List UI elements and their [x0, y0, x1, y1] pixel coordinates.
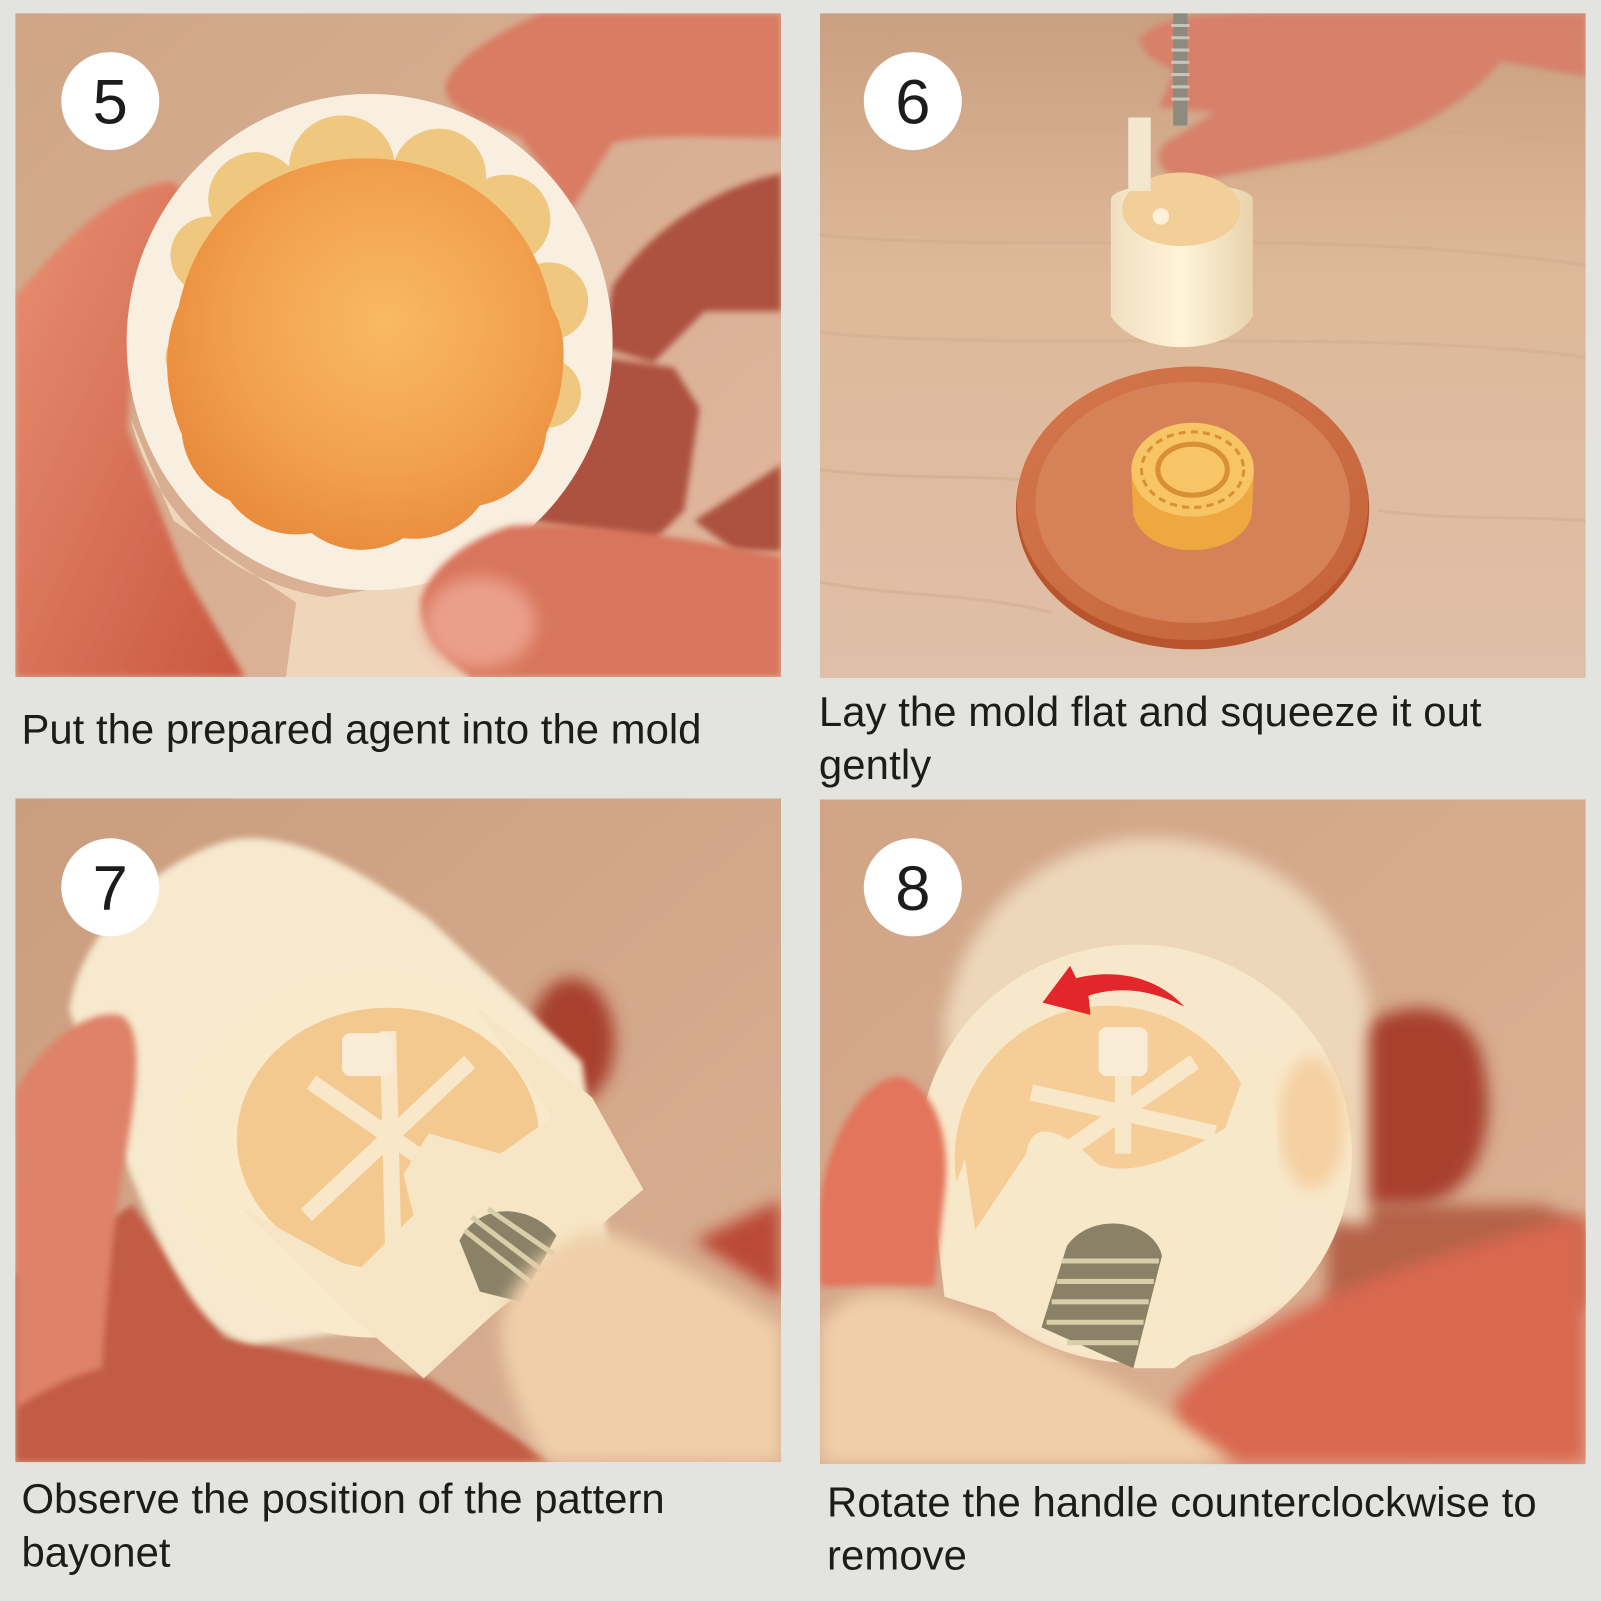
badge: 7: 7 [93, 854, 128, 924]
mold opening [954, 1006, 1241, 1230]
background finger [1348, 1008, 1488, 1205]
hand: lower [15, 1205, 551, 1462]
panel: step 6 photo [820, 13, 1586, 678]
handle cross piece [277, 1090, 644, 1378]
caption: step 5: Put the prepared agent into the mold [21, 705, 701, 752]
badge: 8 [864, 838, 962, 936]
mold face [324, 1326, 376, 1338]
spring [1041, 1223, 1162, 1368]
panel: step 5 photo [15, 13, 781, 677]
inner tab [342, 1033, 393, 1076]
lower background hand [1327, 1205, 1586, 1327]
hand: left finger [820, 1077, 946, 1287]
inner tab [1099, 1027, 1148, 1076]
caption: step 6: Lay the mold flat and squeeze it out [819, 688, 1482, 735]
badge: 5 [61, 52, 159, 150]
caption: step 6 [819, 688, 1482, 788]
hand: bottom thumb [421, 525, 781, 677]
yellow petals inside the mold [165, 115, 588, 428]
mold opening [237, 1008, 539, 1269]
blurred thumb [500, 1230, 781, 1462]
spring rod [1171, 13, 1190, 126]
caption: step 8: Rotate the handle counterclockwise to [827, 1478, 1537, 1525]
panel: step 8 photo [820, 799, 1586, 1464]
mold rim [127, 94, 613, 590]
badge: 7 [61, 838, 159, 936]
hand: index finger [15, 1014, 137, 1409]
mold body [944, 837, 1368, 1225]
arrow: counterclockwise [1042, 966, 1184, 1015]
badge: 6 [864, 52, 962, 150]
pale orange tint on the rim [1279, 1057, 1345, 1190]
badge: 6: 6 [895, 68, 930, 138]
caption: step 6: gently [819, 741, 931, 788]
caption: step 7: Observe the position of the pattern [21, 1475, 665, 1522]
hand: left palm [15, 182, 245, 677]
badge: 8: 8 [895, 854, 930, 924]
mold face [919, 944, 1352, 1363]
wood grain [820, 123, 1586, 613]
mold lower body [131, 419, 470, 677]
hand: top finger [445, 13, 781, 209]
background finger [529, 978, 615, 1105]
spring [459, 1209, 556, 1302]
mold cylinder [1111, 117, 1253, 347]
mooncake [1131, 423, 1254, 550]
blurred handle [820, 1294, 1235, 1464]
dough ball [167, 158, 564, 550]
mold body [69, 838, 613, 1344]
panel: step 7 photo [15, 798, 781, 1462]
hand above mold [1138, 13, 1586, 182]
thumbnail highlight [424, 577, 536, 669]
hand: right thumb [1174, 1215, 1586, 1464]
caption: step 8 [827, 1478, 1537, 1578]
caption: step 7 [21, 1475, 665, 1575]
handle cross piece [938, 1084, 1277, 1368]
hand: right fingers [531, 174, 781, 551]
plate [1016, 367, 1369, 649]
badge: 5: 5 [93, 68, 128, 138]
caption: step 8: remove [827, 1531, 967, 1578]
inner spokes [306, 1031, 470, 1246]
caption: step 7: bayonet [21, 1528, 171, 1575]
inner spokes [1031, 1062, 1215, 1154]
